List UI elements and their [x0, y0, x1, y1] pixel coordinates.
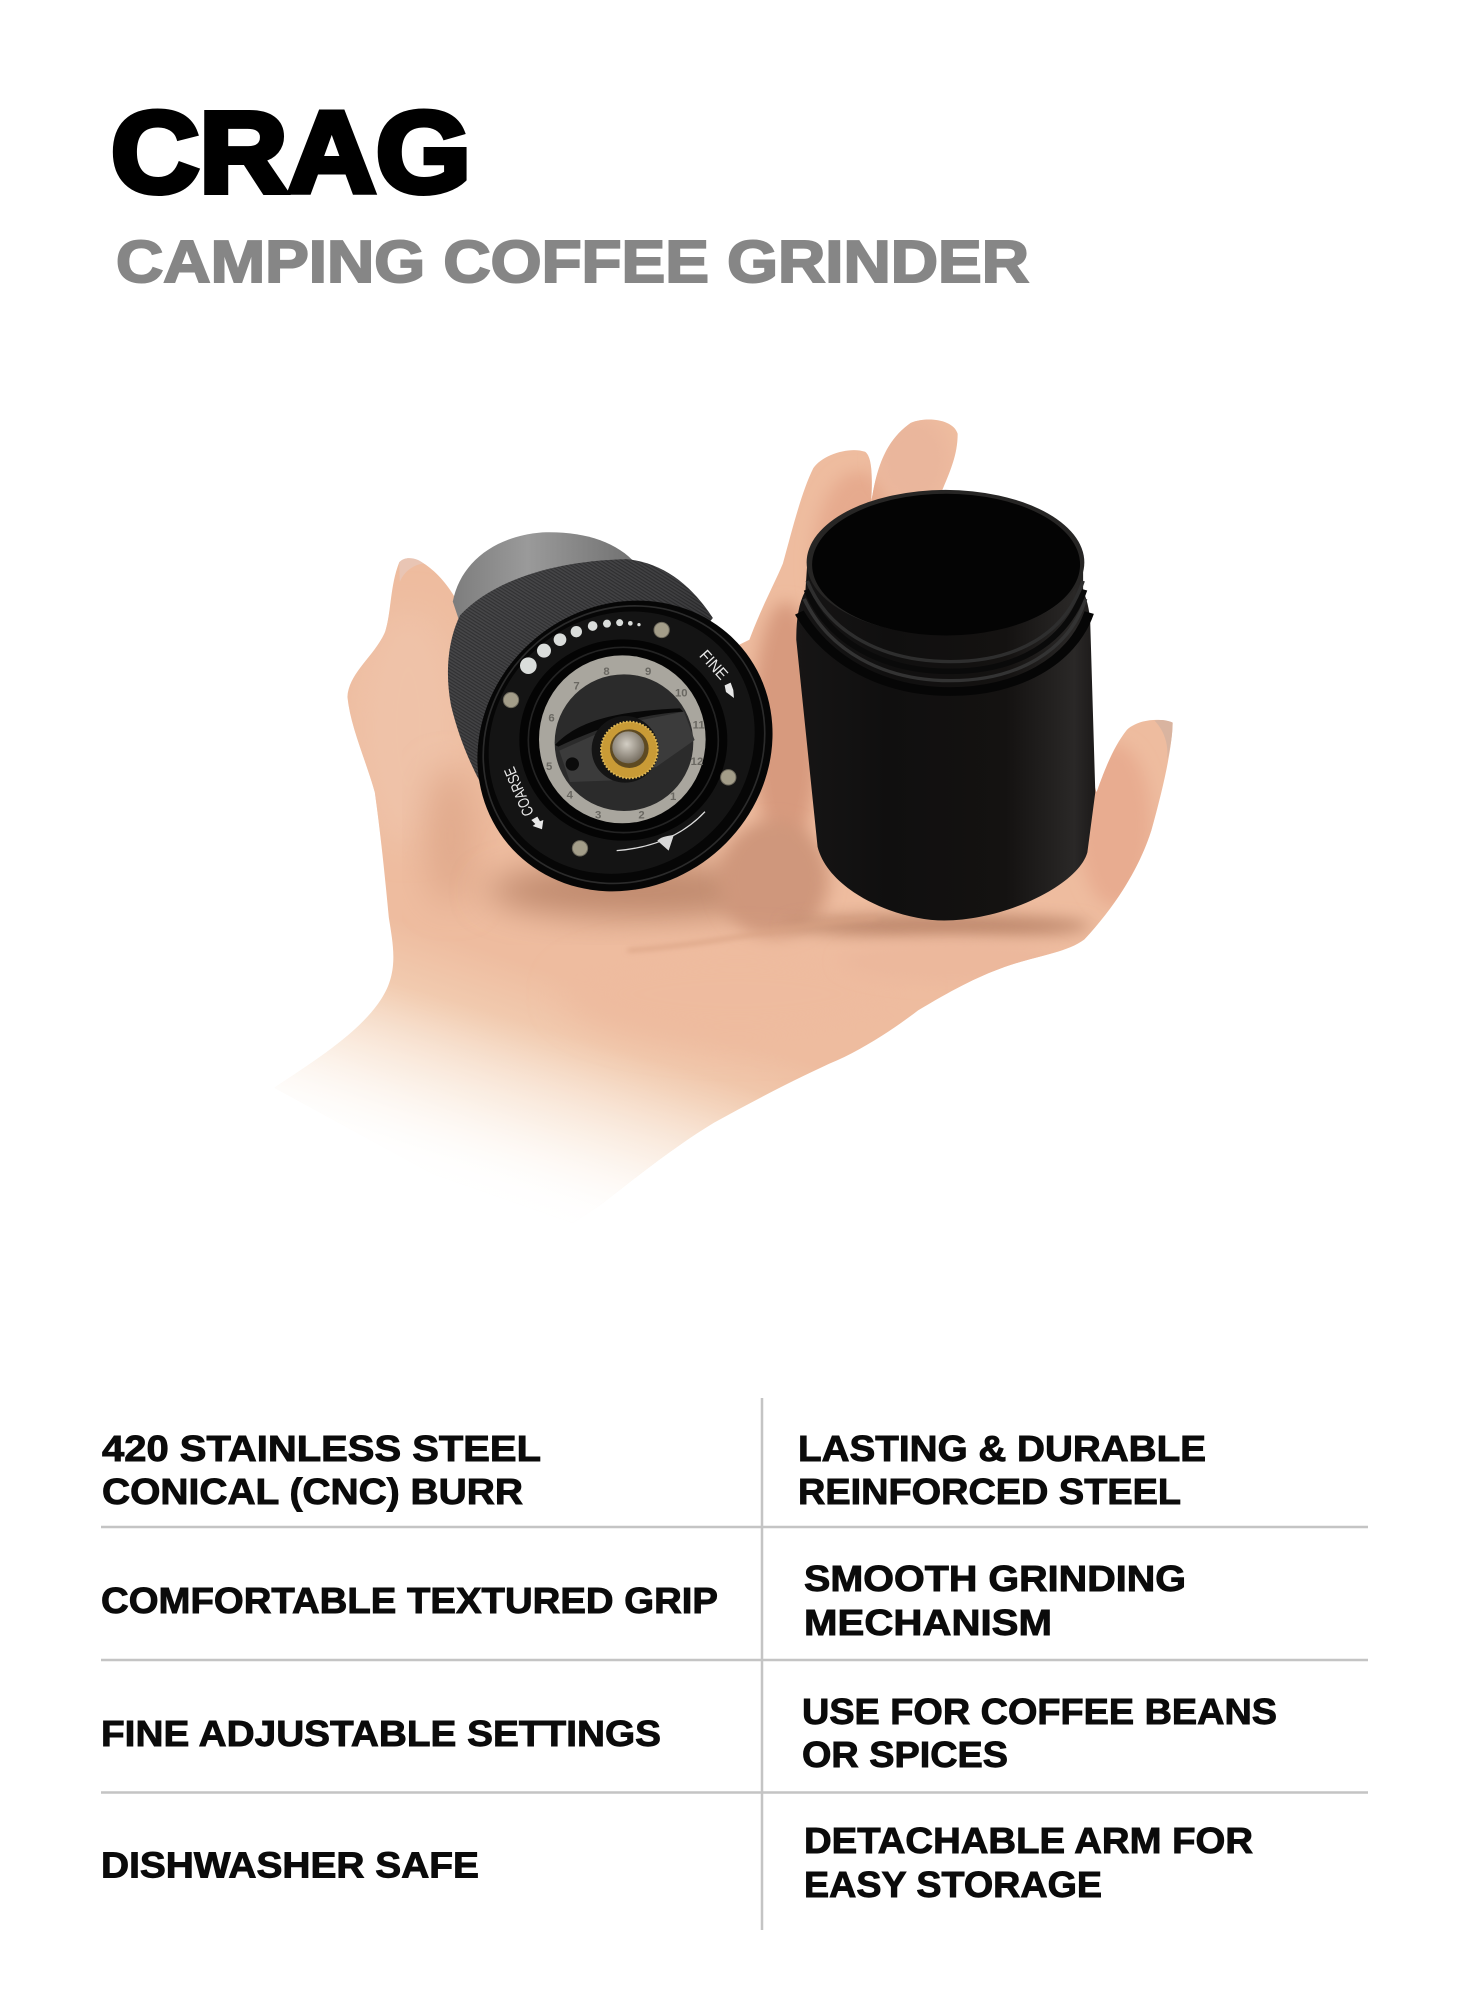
dial numbers: 4 [567, 789, 574, 801]
dial numbers: 12 [691, 756, 703, 768]
feature: smooth grinding: SMOOTH GRINDING [804, 1558, 1186, 1599]
dial numbers [546, 666, 705, 821]
feature: detachable arm [804, 1820, 1253, 1905]
cup [796, 490, 1095, 920]
photo: hand holding grinder and cup [274, 416, 1173, 1223]
feature: coffee or spices: OR SPICES [802, 1734, 1008, 1775]
feature: stainless steel burr [102, 1428, 541, 1512]
dial numbers: 7 [573, 680, 580, 692]
grinder [418, 532, 832, 951]
dial numbers: 3 [595, 809, 601, 821]
grinder face [418, 541, 832, 951]
cup threads [799, 581, 1089, 692]
feature: stainless steel burr: CONICAL (CNC) BURR [102, 1471, 523, 1512]
dial numbers: 5 [546, 761, 552, 773]
feature: adjustable settings: FINE ADJUSTABLE SETTINGS [101, 1713, 661, 1754]
feature: coffee or spices [802, 1691, 1277, 1775]
title: CRAG: CRAG [111, 89, 471, 217]
alignment marker [617, 812, 705, 851]
dial numbers: 8 [603, 666, 610, 678]
cup rim and opening [807, 490, 1084, 635]
feature: detachable arm: DETACHABLE ARM FOR [804, 1820, 1253, 1861]
steel dial ring [539, 655, 706, 823]
feature: coffee or spices: USE FOR COFFEE BEANS [802, 1691, 1277, 1732]
feature: detachable arm: EASY STORAGE [804, 1864, 1102, 1905]
feature: lasting and durable [798, 1428, 1206, 1512]
dial numbers: 10 [675, 688, 688, 700]
dial numbers: 1 [670, 791, 676, 803]
cup body [796, 564, 1095, 920]
label: coarse: COARSE [502, 764, 538, 818]
hand [274, 416, 1173, 1223]
grinder knurled body [448, 559, 713, 806]
dial numbers: 11 [693, 719, 705, 731]
feature: lasting and durable: LASTING & DURABLE [798, 1428, 1206, 1469]
arrows [531, 817, 543, 829]
burr knob [555, 674, 693, 811]
grinder cap [453, 532, 640, 629]
nails [399, 558, 424, 582]
features table [101, 1398, 1368, 1930]
feature: lasting and durable: REINFORCED STEEL [798, 1471, 1181, 1512]
feature: stainless steel burr: 420 STAINLESS STEEL [102, 1428, 541, 1469]
dial numbers: 6 [548, 713, 555, 725]
coarseness dots [520, 619, 641, 674]
dial numbers: 2 [638, 809, 645, 821]
label: fine: FINE [696, 647, 731, 683]
brass nut [601, 722, 658, 778]
feature: smooth grinding [804, 1558, 1186, 1643]
feature: dishwasher safe: DISHWASHER SAFE [101, 1844, 479, 1886]
table grid lines [101, 1398, 1368, 1930]
dial numbers: 9 [645, 666, 651, 678]
feature: smooth grinding: MECHANISM [804, 1602, 1052, 1643]
screws [503, 622, 736, 856]
feature: textured grip: COMFORTABLE TEXTURED GRIP [101, 1580, 718, 1621]
subtitle: camping coffee grinder: CAMPING COFFEE GRINDER [116, 229, 1029, 295]
